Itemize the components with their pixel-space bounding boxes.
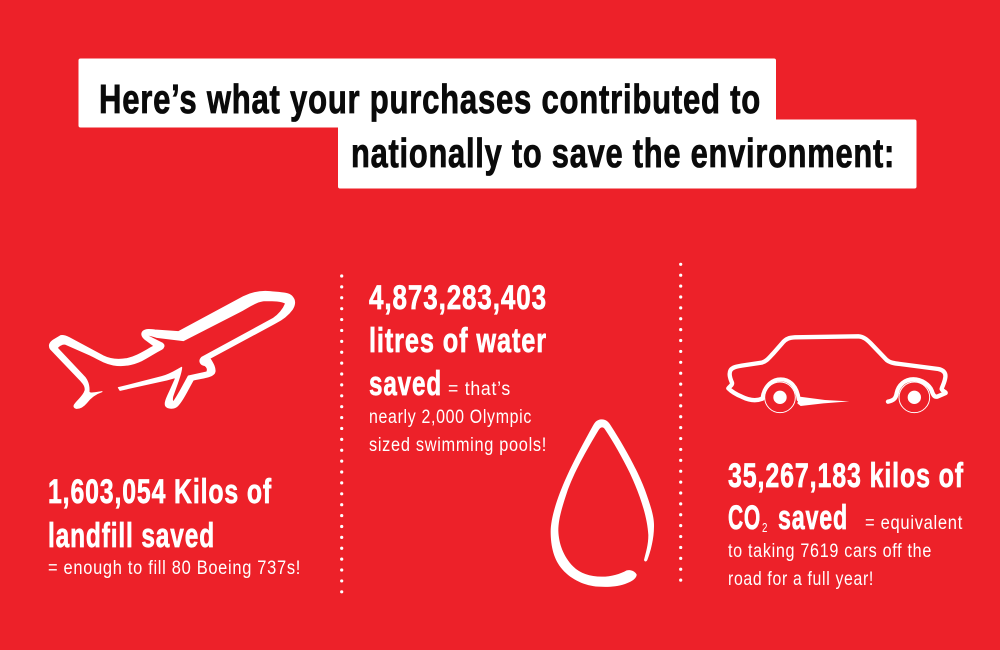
landfill statistic: landfill saved (48, 517, 215, 555)
water statistic: sized swimming pools! (369, 435, 547, 456)
water statistic: = that’s (448, 379, 511, 400)
CO2 statistic (728, 457, 964, 590)
landfill statistic: 1,603,054 Kilos of (48, 473, 272, 511)
CO2 statistic: CO (728, 499, 761, 537)
water statistic: nearly 2,000 Olympic (369, 407, 532, 428)
CO2 statistic: road for a full year! (728, 569, 874, 590)
CO2 statistic: saved (778, 499, 848, 537)
CO2 statistic: 2 (762, 520, 768, 535)
CO2 statistic: = equivalent (865, 513, 963, 534)
water statistic (369, 279, 547, 456)
icon: car (728, 336, 946, 413)
water statistic: 4,873,283,403 (369, 279, 547, 317)
CO2 statistic: to taking 7619 cars off the (728, 541, 932, 562)
landfill statistic (48, 473, 301, 579)
landfill statistic: = enough to fill 80 Boeing 737s! (48, 558, 301, 579)
title banner: Here’s what your purchases contributed to (99, 76, 761, 122)
dotted column dividers (342, 264, 681, 594)
icon: water drop (551, 419, 654, 587)
water statistic: saved (369, 365, 442, 403)
icon: airplane (49, 291, 295, 408)
title banner (78, 58, 916, 188)
water statistic: litres of water (369, 322, 547, 360)
